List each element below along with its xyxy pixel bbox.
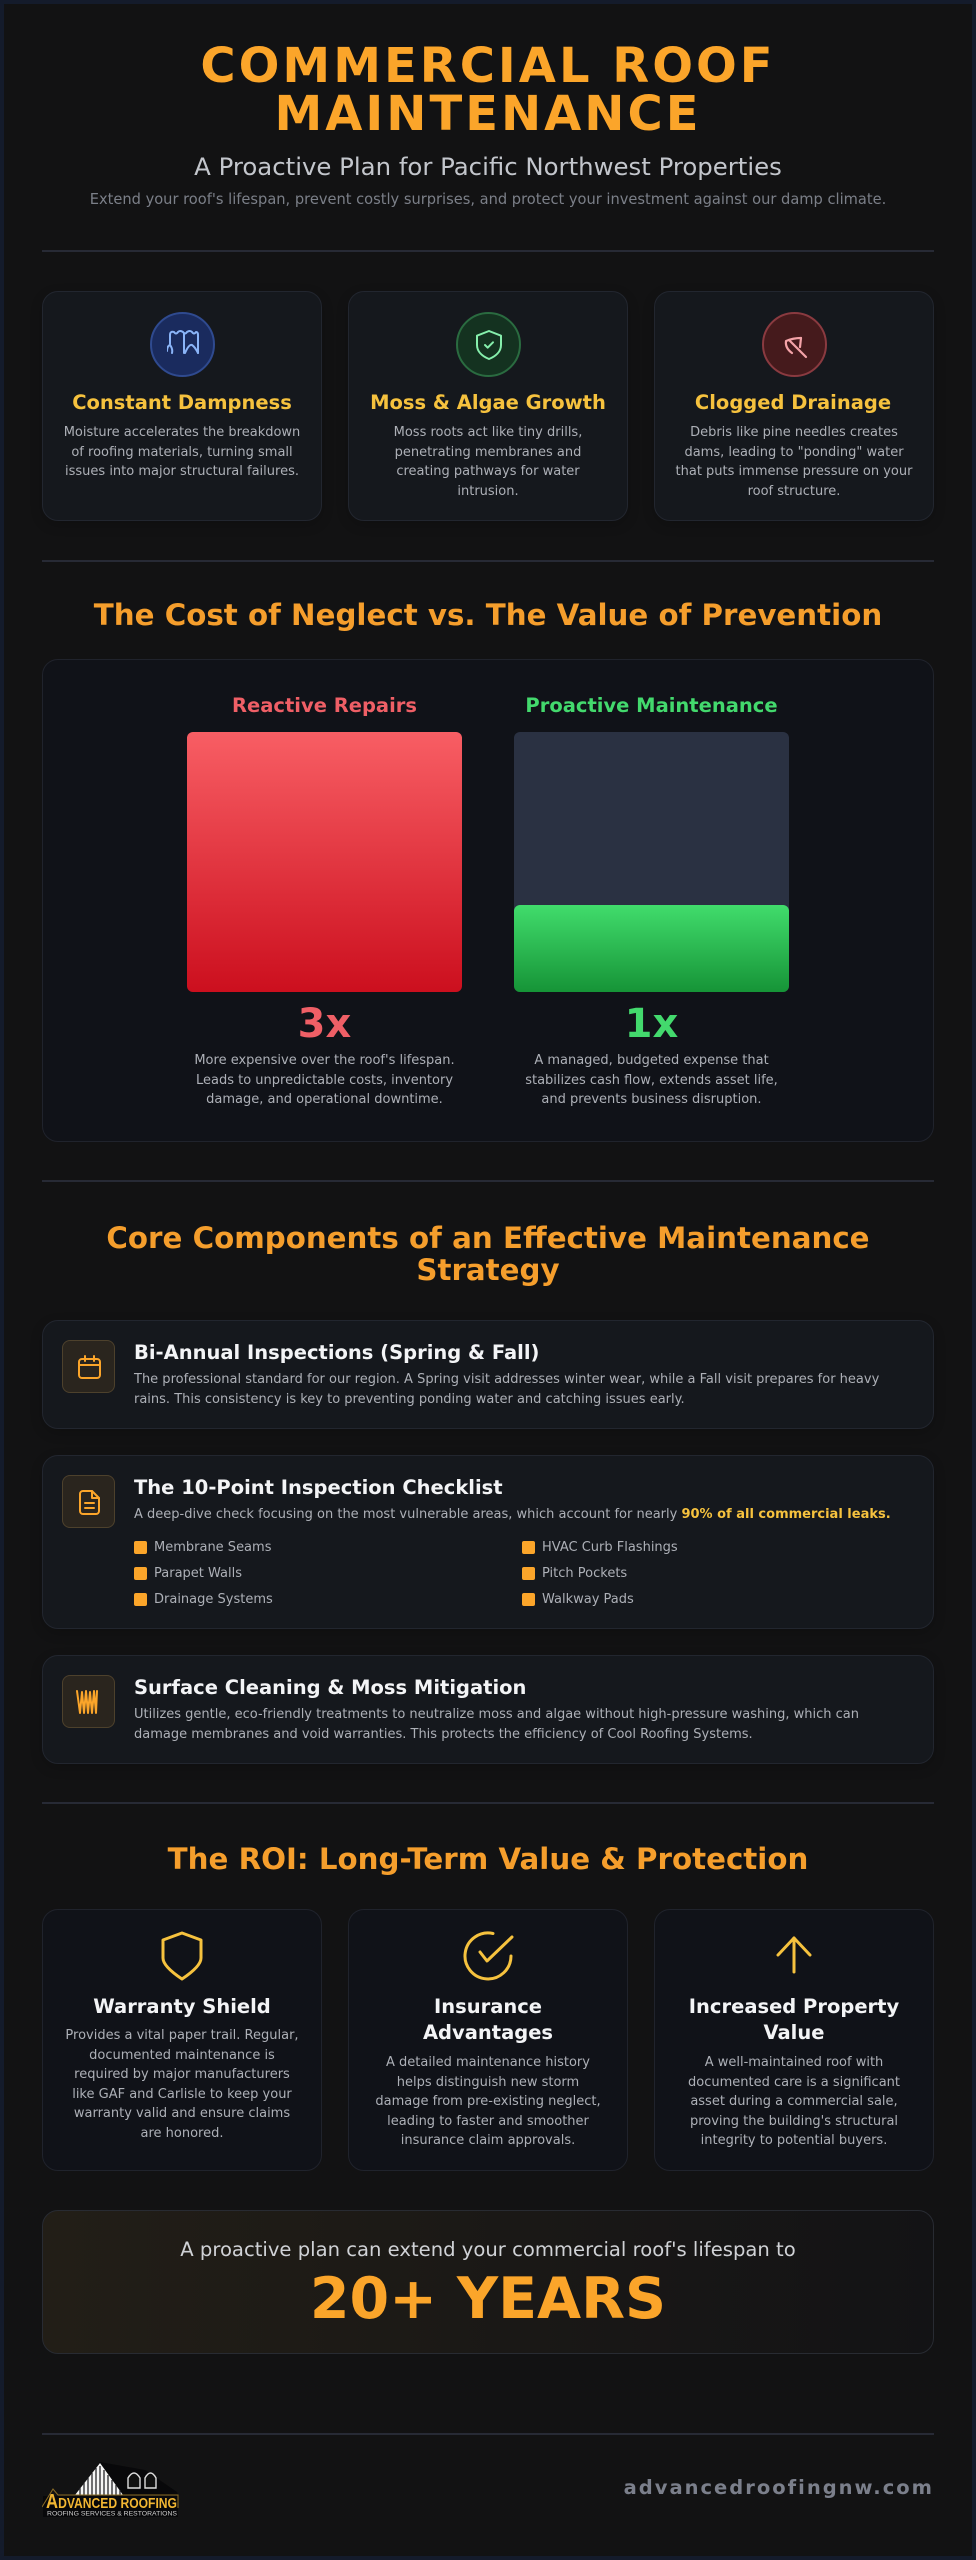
description: helps distinguish new storm bbox=[397, 2074, 579, 2090]
icon: moss brush bbox=[62, 1675, 115, 1728]
description: required by major manufacturers bbox=[74, 2067, 290, 2082]
heading bbox=[423, 1995, 553, 2044]
description: documented maintenance is bbox=[89, 2048, 275, 2062]
description: asset during a commercial sale, bbox=[690, 2094, 898, 2109]
heading: Increased Property bbox=[689, 1995, 899, 2018]
item heading: Surface Cleaning & Moss Mitigation bbox=[134, 1676, 526, 1699]
heading: Warranty Shield bbox=[93, 1995, 271, 2018]
description: proactive: and prevents business disruption. bbox=[541, 1092, 762, 1107]
description: warranty valid and ensure claims bbox=[74, 2106, 290, 2121]
footer logo bbox=[42, 2462, 178, 2518]
heading: roi: The ROI: Long-Term Value & Protection bbox=[168, 1842, 808, 1876]
description bbox=[375, 2055, 601, 2148]
heading: core components: Strategy bbox=[416, 1253, 560, 1287]
heading: Clogged Drainage bbox=[695, 391, 891, 414]
footer logo: ROOFING SERVICES & RESTORATIONS bbox=[47, 2510, 178, 2518]
panel: cost comparison bbox=[42, 659, 934, 1142]
description: reactive: More expensive over the roof's lifespan. bbox=[194, 1053, 455, 1068]
callout text: A proactive plan can extend your commercial roof's lifespan to bbox=[180, 2238, 796, 2261]
item text: The professional standard for our region. A Spring visit addresses winter wear, while a Fall visit prepares for heavy bbox=[134, 1372, 879, 1387]
header bbox=[90, 38, 886, 208]
description: proactive: stabilizes cash flow, extends asset life, bbox=[525, 1072, 778, 1088]
card: constant dampness bbox=[42, 291, 322, 521]
description: Moisture accelerates the breakdown bbox=[64, 425, 300, 440]
tagline: Extend your roof's lifespan, prevent costly surprises, and protect your investment against our damp climate. bbox=[90, 191, 886, 208]
description: damage from pre-existing neglect, bbox=[375, 2094, 601, 2109]
description bbox=[676, 425, 912, 498]
description bbox=[64, 425, 300, 479]
icon: calendar bbox=[62, 1340, 115, 1393]
bar: reactive bbox=[187, 732, 462, 992]
title: COMMERCIAL ROOF bbox=[200, 38, 776, 94]
icon: document bbox=[62, 1475, 115, 1528]
panel: 10-point checklist bbox=[42, 1455, 934, 1629]
description: like GAF and Carlisle to keep your bbox=[72, 2086, 292, 2102]
description: roof structure. bbox=[748, 484, 840, 498]
description: creating pathways for water bbox=[396, 464, 580, 479]
bar fill: proactive bbox=[514, 905, 789, 992]
description: leading to faster and smoother bbox=[387, 2114, 589, 2128]
card: moss and algae bbox=[348, 291, 628, 521]
description bbox=[65, 2028, 299, 2140]
description: intrusion. bbox=[457, 484, 519, 498]
title: MAINTENANCE bbox=[274, 86, 701, 142]
checklist: right column: Pitch Pockets bbox=[542, 1566, 627, 1581]
label: proactive: Proactive Maintenance bbox=[525, 694, 778, 717]
description: A detailed maintenance history bbox=[386, 2055, 590, 2070]
description: proactive bbox=[525, 1053, 778, 1107]
label: reactive: Reactive Repairs bbox=[232, 694, 417, 717]
panel: surface cleaning bbox=[42, 1655, 934, 1764]
checklist: left column: Parapet Walls bbox=[154, 1566, 242, 1581]
icon: shield bbox=[162, 1932, 202, 1980]
heading: core components bbox=[106, 1221, 870, 1287]
description: proactive: A managed, budgeted expense that bbox=[534, 1053, 769, 1068]
panel: roi cards bbox=[42, 1909, 934, 2171]
heading: Constant Dampness bbox=[72, 391, 292, 414]
description: Moss roots act like tiny drills, bbox=[394, 425, 582, 440]
icon: up arrow bbox=[776, 1936, 812, 1974]
card: warranty shield bbox=[42, 1909, 322, 2171]
description: dams, leading to "ponding" water bbox=[684, 444, 904, 460]
description: integrity to potential buyers. bbox=[701, 2133, 887, 2148]
subtitle: A Proactive Plan for Pacific Northwest Properties bbox=[194, 152, 782, 181]
card: insurance advantages bbox=[348, 1909, 628, 2171]
description: reactive: damage, and operational downtime. bbox=[206, 1092, 443, 1107]
icon: blocked drain bbox=[762, 312, 827, 377]
card: property value bbox=[654, 1909, 934, 2171]
description: that puts immense pressure on your bbox=[676, 464, 912, 479]
icon: check circle bbox=[463, 1931, 514, 1980]
card: clogged drainage bbox=[654, 291, 934, 521]
icon: shield check bbox=[456, 312, 521, 377]
checklist: right column: Walkway Pads bbox=[542, 1592, 634, 1607]
description: of roofing materials, turning small bbox=[71, 444, 293, 460]
icon: dampness bbox=[150, 312, 215, 377]
value: 1x: 1x bbox=[625, 1001, 678, 1047]
item text: rains. This consistency is key to preventing ponding water and catching issues early. bbox=[134, 1392, 685, 1406]
heading: core components: Core Components of an Effective Maintenance bbox=[106, 1221, 870, 1255]
item heading: Bi-Annual Inspections (Spring & Fall) bbox=[134, 1341, 539, 1364]
checklist: left column bbox=[134, 1540, 273, 1607]
panel: bi-annual inspections bbox=[42, 1320, 934, 1429]
title bbox=[200, 38, 776, 142]
description bbox=[394, 425, 582, 498]
callout number: 20+ YEARS bbox=[310, 2266, 666, 2332]
item text bbox=[134, 1372, 879, 1406]
heading: cost of neglect: The Cost of Neglect vs. The Value of Prevention bbox=[94, 598, 882, 632]
bar: proactive bbox=[514, 732, 789, 992]
description: reactive: Leads to unpredictable costs, inventory bbox=[196, 1072, 453, 1088]
description: are honored. bbox=[140, 2126, 223, 2140]
description: proving the building's structural bbox=[690, 2114, 898, 2128]
description: insurance claim approvals. bbox=[401, 2133, 575, 2148]
item text: Utilizes gentle, eco-friendly treatments to neutralize moss and algae without high-pressure washing, which can bbox=[134, 1707, 859, 1722]
item heading: The 10-Point Inspection Checklist bbox=[134, 1476, 503, 1499]
callout: 20+ years bbox=[42, 2210, 934, 2354]
value: 3x: 3x bbox=[298, 1001, 351, 1047]
checklist: left column: Drainage Systems bbox=[154, 1592, 273, 1607]
description: Debris like pine needles creates bbox=[690, 425, 898, 440]
description: reactive bbox=[194, 1053, 455, 1107]
description: issues into major structural failures. bbox=[65, 464, 299, 479]
footer website: advancedroofingnw.com bbox=[624, 2476, 934, 2499]
description: A well-maintained roof with bbox=[705, 2055, 883, 2070]
description: penetrating membranes and bbox=[395, 444, 581, 460]
panel: problem cards bbox=[42, 291, 934, 521]
checklist: right column bbox=[522, 1540, 678, 1607]
description bbox=[688, 2055, 900, 2148]
heading: Insurance bbox=[434, 1995, 542, 2018]
item text bbox=[134, 1707, 859, 1742]
description: Provides a vital paper trail. Regular, bbox=[65, 2028, 299, 2043]
description: documented care is a significant bbox=[688, 2074, 900, 2090]
checklist: right column: HVAC Curb Flashings bbox=[542, 1540, 678, 1555]
item text: A deep-dive check focusing on the most vulnerable areas, which account for nearly 90% of all commercial leaks. bbox=[134, 1507, 891, 1522]
heading: Advantages bbox=[423, 2021, 553, 2044]
heading: Moss & Algae Growth bbox=[370, 391, 606, 414]
heading bbox=[689, 1995, 899, 2044]
item text: damage membranes and void warranties. This protects the efficiency of Cool Roofing Systems. bbox=[134, 1726, 753, 1742]
heading: Value bbox=[764, 2021, 824, 2044]
checklist: left column: Membrane Seams bbox=[154, 1540, 271, 1555]
